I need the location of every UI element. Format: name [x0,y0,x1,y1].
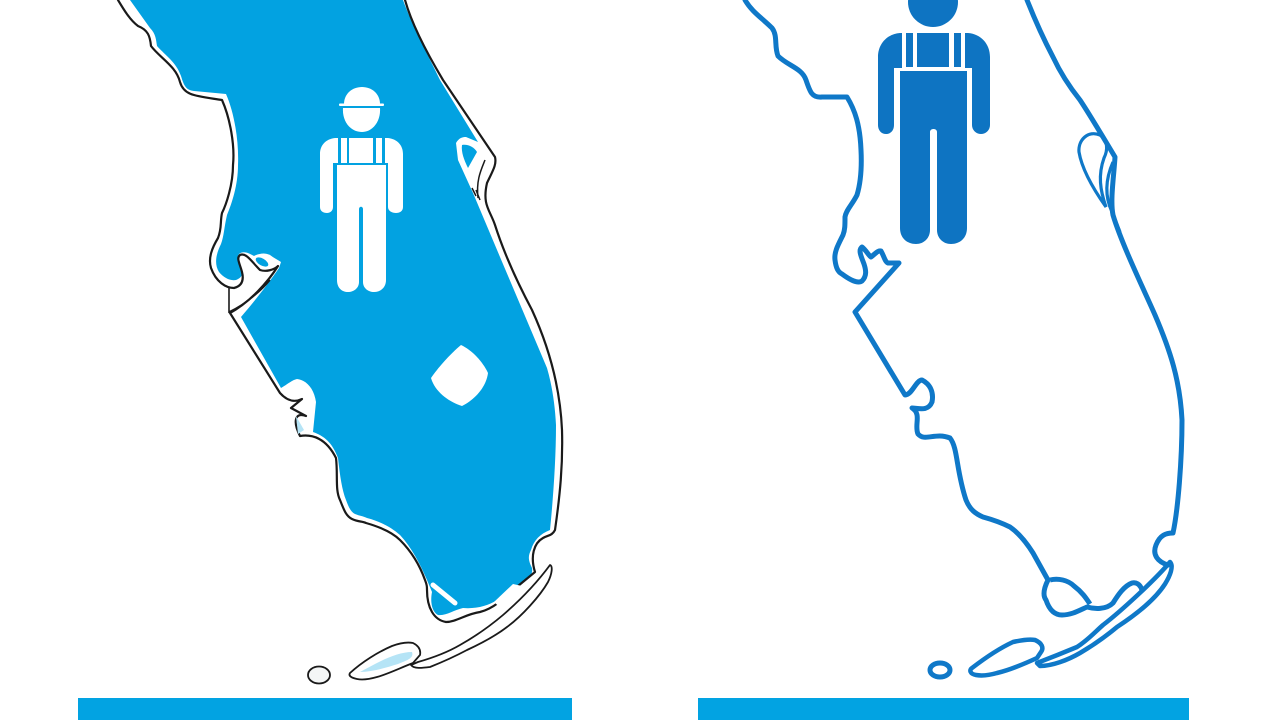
worker head [343,108,380,132]
Florida Bay white stroke [433,585,455,603]
worker left arm [878,33,902,134]
white Everglades gap [494,584,528,612]
worker right arm [965,33,990,134]
worker bib [917,33,949,67]
worker straps [906,33,913,67]
Florida Keys outline [1037,562,1172,666]
small Key West islet [930,663,950,677]
icon: worker in hard hat (white) [320,87,403,292]
bottom bar right [698,698,1189,720]
Florida Keys upper [411,565,552,668]
worker legs [337,165,386,292]
Lake Okeechobee [431,345,488,406]
panel: left filled Florida map [78,0,572,720]
east coast outline [1027,0,1182,565]
icon: worker (blue) [878,0,990,244]
worker head [908,0,958,27]
Florida Keys light blue wash [360,652,412,672]
Tampa Bay island [253,254,271,270]
Cape Canaveral loop [1079,134,1120,232]
Florida Bay loop [1050,579,1090,604]
Cape Canaveral lagoon [462,145,477,168]
worker left arm [320,138,338,213]
worker right arm [385,138,403,213]
bottom bar left [78,698,572,720]
map coastline outline blue [745,0,1142,615]
map coastline outline [118,0,562,622]
hard hat [344,87,380,104]
small Key West islet [308,666,330,684]
map Tampa Bay outline [229,280,270,312]
worker torso and legs [900,71,967,244]
worker bib [349,138,373,163]
Florida Keys lower island [349,643,420,679]
Florida Keys outline lower island [970,640,1042,675]
Charlotte Harbor pale inlet [296,416,304,434]
Cape Canaveral strokes [472,160,485,200]
map fill: Florida peninsula [130,0,556,615]
worker straps [341,138,347,163]
panel: right outlined Florida map [698,0,1189,720]
